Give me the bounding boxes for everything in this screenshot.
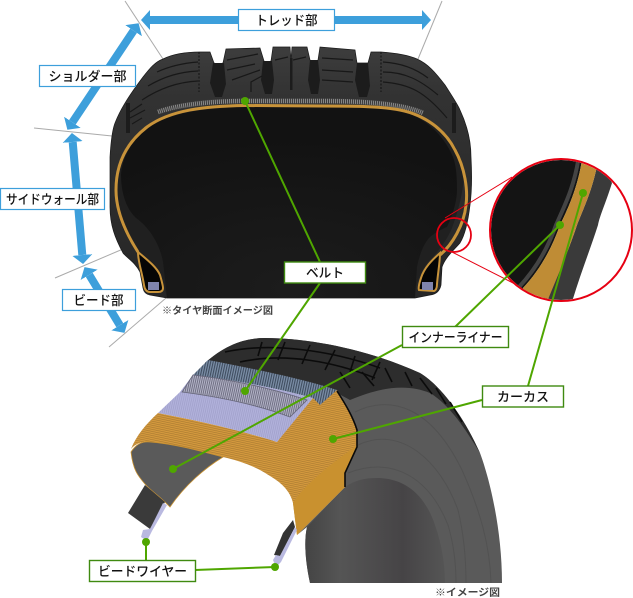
arrow: sidewall: [73, 142, 82, 255]
inner liner: [131, 442, 223, 507]
orange carcass: [523, 163, 596, 299]
tire cross-section: [110, 47, 472, 298]
label: bead: ビード部: [74, 293, 124, 308]
green leader: carcass: [329, 189, 587, 443]
left bead: [138, 252, 163, 292]
green leader: inner liner: [169, 221, 564, 473]
label: bead: [62, 290, 136, 310]
zoom connector lines: [445, 177, 517, 285]
note: cross-section image: ※タイヤ断面イメージ図: [162, 304, 273, 317]
tread: [205, 338, 480, 453]
label: inner liner: インナーライナー: [408, 330, 502, 345]
arrow: tread: [150, 16, 422, 24]
right bead fragment: [273, 520, 297, 567]
rim opening: [305, 478, 445, 583]
outer rubber: [543, 170, 612, 300]
label: tread: トレッド部: [256, 13, 318, 28]
upper tread layer: [193, 360, 337, 405]
green leader: bead wire: [142, 538, 279, 571]
arrow: shoulder: [72, 31, 134, 122]
magnified detail: [489, 158, 633, 302]
label: shoulder: [40, 66, 136, 86]
carcass lower band: [293, 445, 357, 535]
label: bead wire: ビードワイヤー: [98, 564, 187, 579]
label: tread: [238, 10, 334, 30]
label: carcass: [482, 386, 564, 407]
label: shoulder: ショルダー部: [48, 69, 126, 84]
guide lines: [34, 1, 442, 347]
cut edge: [337, 391, 357, 487]
tread pattern: [225, 342, 462, 422]
tread sipes: [130, 52, 447, 124]
label: carcass: カーカス: [497, 390, 549, 404]
lower tire cutaway: [128, 338, 502, 583]
belt band: [158, 101, 423, 113]
label: inner liner: [402, 326, 508, 348]
label: belt: [284, 262, 366, 283]
label: sidewall: [0, 188, 104, 210]
cavity area: [491, 160, 582, 289]
tread grooves: [126, 58, 456, 133]
sidewall rings: [348, 405, 491, 583]
green leader: belt: [241, 97, 320, 395]
left bead fragment: [128, 485, 167, 541]
label: bead wire: [90, 560, 196, 582]
carcass ply line: [116, 106, 467, 255]
inner liner band: [519, 155, 579, 287]
belt layer upper: [182, 375, 307, 417]
small detail circle: [437, 218, 471, 252]
tire body: [110, 47, 472, 298]
cavity: [121, 107, 457, 298]
inner wall: [115, 105, 464, 298]
label: sidewall: サイドウォール部: [6, 192, 99, 207]
belt layer lower: [158, 375, 313, 442]
carcass layer: [131, 390, 357, 535]
label: belt: ベルト: [306, 266, 344, 280]
arrow: bead: [89, 275, 120, 325]
sidewall: [205, 338, 502, 583]
right bead: [419, 253, 440, 291]
